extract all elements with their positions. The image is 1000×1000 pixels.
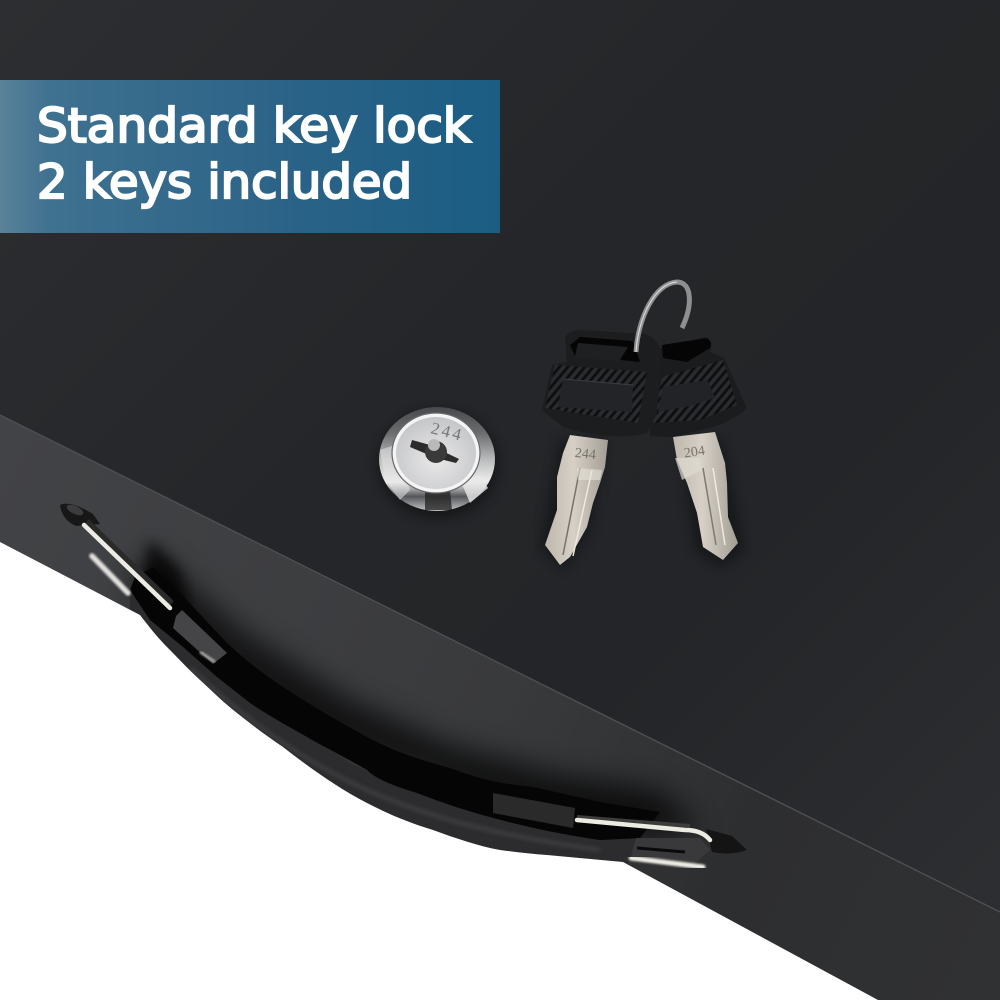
front face of the box [0, 414, 1000, 912]
band highlight [190, 668, 600, 850]
right rods [577, 817, 710, 867]
caption banner [0, 80, 500, 233]
left handle slot [60, 503, 100, 526]
stamped number: 244 [429, 418, 466, 445]
key slot [410, 439, 459, 463]
left rods [84, 522, 171, 608]
stamped number: 244 [574, 446, 597, 463]
key head [650, 337, 747, 437]
handle outer band [130, 590, 640, 866]
key ring [636, 282, 689, 352]
key blade [673, 432, 738, 560]
key shadow [680, 440, 745, 568]
left key [540, 330, 662, 570]
stamped number: 204 [683, 444, 706, 461]
right handle slot [630, 829, 747, 868]
lock cylinder [378, 407, 498, 518]
white background below the box [0, 542, 878, 1000]
key shadow [540, 440, 606, 570]
handle black recess [130, 567, 660, 840]
right slide block [493, 793, 575, 828]
left slide block [173, 610, 227, 664]
key head [542, 330, 662, 436]
handle [60, 503, 747, 868]
key blade [545, 435, 608, 565]
right key [650, 337, 747, 568]
lock shadow [378, 410, 498, 518]
chrome bezel [379, 407, 495, 511]
caption line 2: 2 keys included [37, 155, 412, 210]
caption line 1: Standard key lock [37, 99, 472, 154]
lock face [392, 413, 480, 493]
